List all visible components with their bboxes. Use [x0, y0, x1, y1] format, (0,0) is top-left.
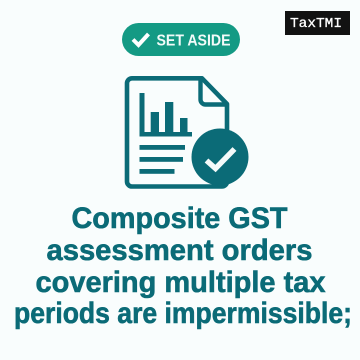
title: Composite GST	[72, 202, 288, 235]
folded corner	[200, 78, 227, 104]
status badge: set aside: SET ASIDE	[156, 32, 230, 49]
title	[14, 202, 352, 330]
title: covering multiple tax	[36, 266, 326, 299]
brand tag: TaxTMI	[285, 11, 350, 35]
title: assessment orders	[46, 234, 312, 267]
bar chart	[140, 93, 192, 136]
check circle	[192, 128, 248, 186]
brand tag: TaxTMI: TaxTMI	[290, 16, 342, 32]
document outline	[127, 78, 227, 186]
status badge: set aside	[122, 23, 240, 56]
icon: document with chart and check	[127, 78, 248, 186]
text lines	[140, 145, 185, 174]
